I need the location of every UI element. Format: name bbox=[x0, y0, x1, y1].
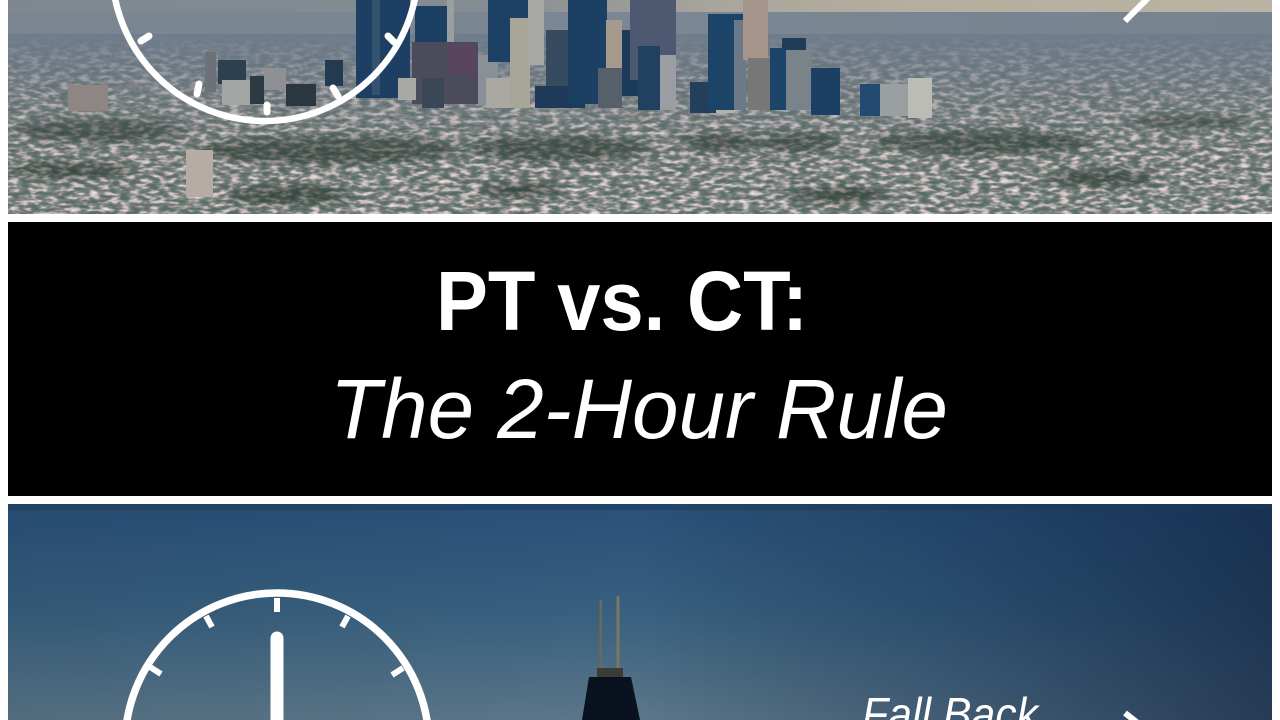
distant hills bbox=[284, 12, 1272, 34]
icon: John Hancock Center silhouette bbox=[582, 596, 640, 720]
title bbox=[330, 254, 948, 456]
dusk sky bbox=[8, 504, 1272, 720]
sky bbox=[8, 0, 1272, 12]
arrow: clock-forward stroke bbox=[1125, 0, 1152, 21]
panel: Chicago skyline photo bbox=[8, 504, 1272, 720]
sprawling city texture bbox=[8, 36, 1272, 214]
title: PT vs. CT: bbox=[436, 254, 808, 348]
panel: Los Angeles skyline photo bbox=[8, 0, 1272, 214]
panel: title band bbox=[8, 222, 1272, 496]
icon: Pacific Time clock bbox=[112, 0, 418, 121]
arrow: Fall Back chevron bbox=[1125, 713, 1139, 720]
downtown buildings bbox=[68, 0, 932, 197]
icon: Central Time clock bbox=[125, 593, 429, 720]
atmospheric haze bbox=[8, 34, 1272, 158]
subtitle: The 2-Hour Rule bbox=[330, 362, 948, 456]
